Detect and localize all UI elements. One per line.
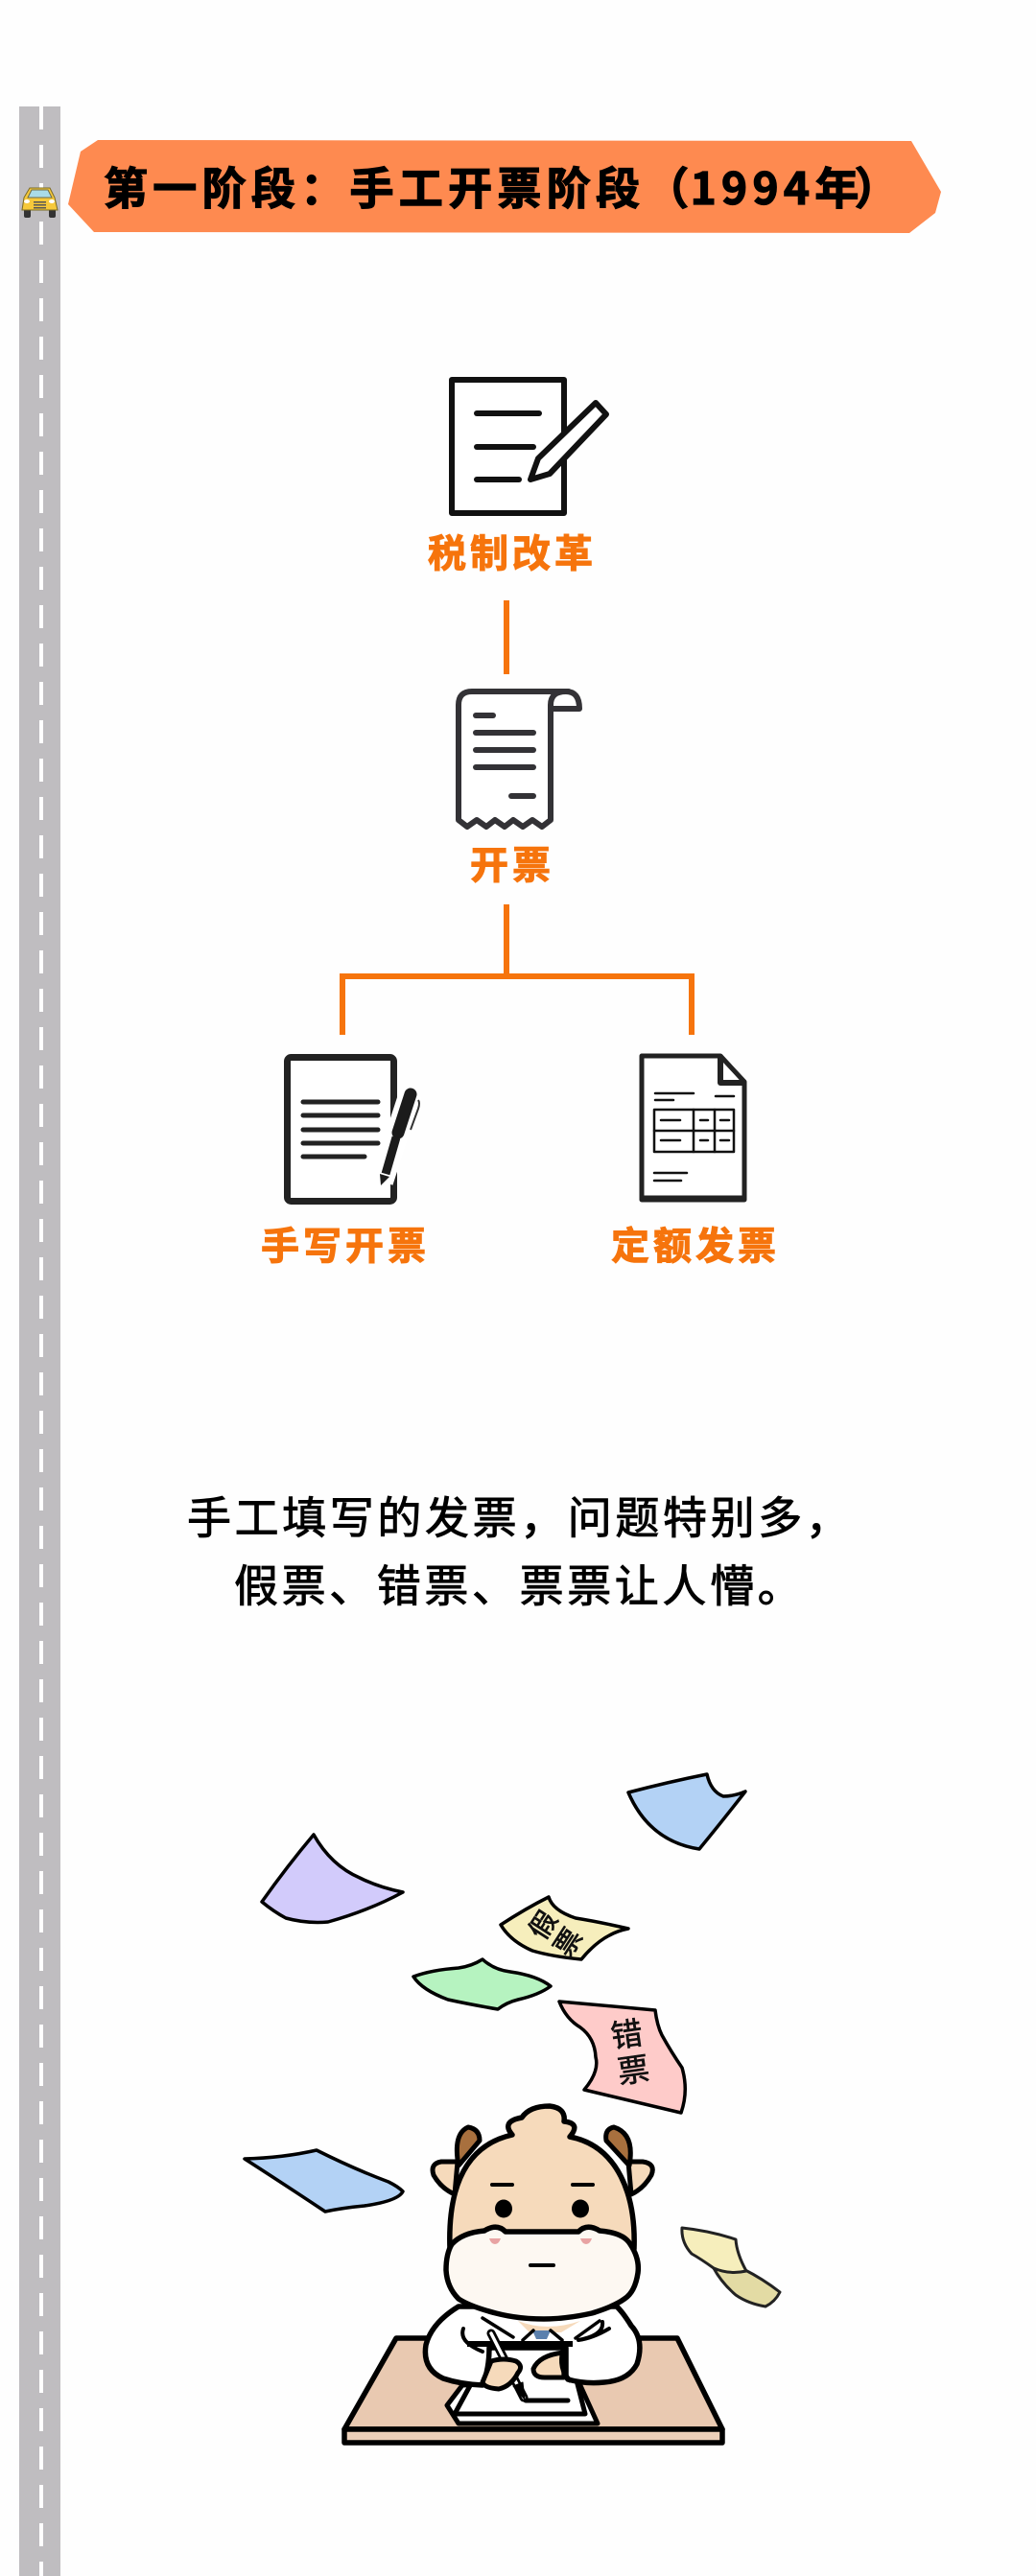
face details [489, 2185, 593, 2265]
paper: yellow folded [682, 2228, 780, 2307]
body text: 手工填写的发票，问题特别多， [187, 1484, 853, 1547]
right sleeve edge [562, 2350, 570, 2380]
ears [433, 2162, 652, 2194]
torso and sleeves [425, 2307, 640, 2385]
paper: yellow labelled fake invoice: 假 [519, 1903, 566, 1946]
paper: pink labelled wrong invoice: 错 [607, 2007, 646, 2057]
icon: handwritten document with pen [288, 1057, 419, 1201]
label: invoicing: 开票 [470, 845, 554, 887]
neck and tie [483, 2318, 600, 2340]
desk [344, 2338, 722, 2443]
road [19, 106, 60, 2576]
collar bar [467, 2341, 573, 2347]
sleeve folds [462, 2322, 609, 2352]
paper: purple [262, 1835, 403, 1922]
icon: fixed-amount invoice document [642, 1056, 744, 1200]
pencil [491, 2333, 525, 2400]
paper: yellow labelled fake invoice: 票 [544, 1920, 591, 1963]
banner heading: 第一阶段：手工开票阶段（1994年） [104, 154, 904, 218]
icon: yellow car [22, 188, 58, 218]
icon: receipt [459, 691, 579, 827]
illustration: cow at desk [344, 2106, 722, 2443]
paper: pink labelled wrong invoice: 票 [614, 2043, 652, 2093]
paper: yellow labelled fake invoice [501, 1897, 628, 1963]
head [450, 2106, 634, 2249]
muzzle [446, 2227, 638, 2319]
paper: green [413, 1959, 551, 2009]
paper: blue lower left [245, 2150, 403, 2212]
horns [457, 2127, 630, 2166]
body text [187, 1484, 853, 1615]
paper: blue top right [628, 1774, 745, 1849]
paper: pink labelled wrong invoice [559, 2002, 685, 2113]
label: tax reform: 税制改革 [428, 533, 597, 575]
body text: 假票、错票、票票让人懵。 [234, 1552, 805, 1615]
left hand [483, 2359, 521, 2389]
branching connector [342, 904, 692, 1035]
label: fixed-amount invoice: 定额发票 [611, 1226, 780, 1268]
papers on desk [447, 2347, 598, 2424]
icon: tax reform document with pencil [452, 380, 606, 513]
right hand [533, 2353, 564, 2377]
connector line [504, 600, 509, 674]
banner heading [68, 140, 941, 233]
label: handwritten invoice: 手写开票 [261, 1226, 430, 1268]
